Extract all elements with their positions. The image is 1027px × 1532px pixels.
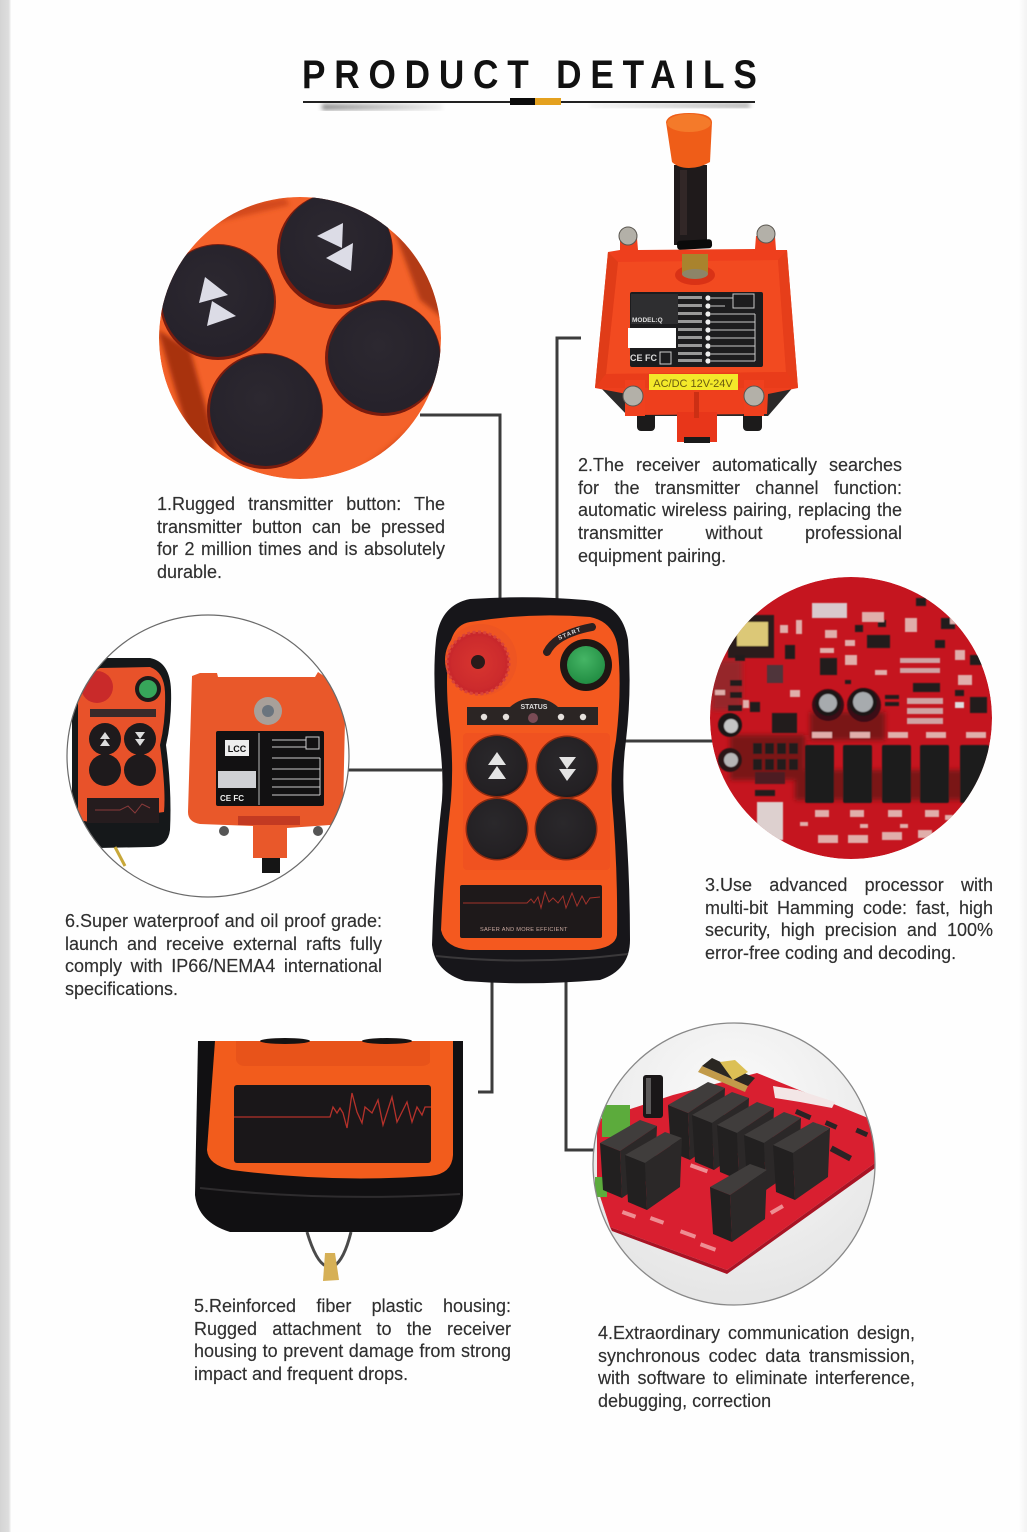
green start button	[560, 639, 612, 691]
recess	[236, 1041, 430, 1066]
start label arc: START	[558, 627, 583, 642]
text block 2: transmitter without professional	[578, 523, 902, 543]
button blank right	[534, 798, 598, 860]
text block 6	[65, 911, 382, 1000]
button with arrows top	[277, 193, 393, 309]
display panel: SAFER AND MORE EFFICIENT	[480, 927, 568, 933]
connector lines	[348, 338, 714, 1150]
photo 2: receiver	[595, 113, 798, 443]
text block 6: 6.Super waterproof and oil proof grade:	[65, 911, 382, 931]
receiver antenna connector	[675, 254, 715, 285]
button blank left	[466, 798, 528, 860]
button right	[325, 300, 441, 416]
text block 2: automatic wireless pairing, replacing the	[578, 500, 902, 520]
small receiver label	[216, 731, 324, 806]
text block 4: debugging, correction	[598, 1391, 771, 1411]
receiver wiring label: CE FC	[630, 353, 658, 363]
receiver wiring label: MODEL:Q	[632, 317, 663, 324]
button up	[466, 734, 528, 798]
small receiver label: LCC	[228, 744, 247, 754]
button with arrows left	[160, 244, 276, 360]
white connector bottom	[757, 802, 783, 840]
transformer	[698, 1058, 755, 1092]
photo 6 outline	[67, 615, 349, 897]
white connector top	[812, 603, 847, 618]
receiver lower connector	[677, 392, 717, 443]
remote orange face	[441, 615, 620, 950]
silkscreen marks	[715, 610, 986, 843]
connector: feature 6	[348, 768, 442, 772]
shading wedges	[158, 198, 445, 470]
text block 6: comply with IP66/NEMA4 international	[65, 956, 382, 976]
white connector	[773, 1086, 835, 1108]
text block 3: 3.Use advanced processor with	[705, 875, 993, 895]
text block 6: launch and receive external rafts fully	[65, 934, 382, 954]
text block 5	[194, 1296, 511, 1384]
receiver voltage label: AC/DC 12V-24V	[653, 378, 733, 390]
text block 4	[598, 1323, 915, 1412]
resistor arrays	[900, 658, 943, 724]
text block 3: security, high precision and 100%	[705, 920, 993, 940]
status bar: STATUS	[521, 704, 548, 711]
text block 1: transmitter button can be pressed	[157, 517, 445, 537]
text block 2: 2.The receiver automatically searches	[578, 455, 902, 475]
start label arc	[547, 627, 592, 652]
text block 1: durable.	[157, 562, 222, 582]
connector: feature 1	[420, 415, 500, 600]
lower shell seam	[436, 954, 628, 961]
connector: feature 4	[566, 980, 597, 1150]
text block 4: 4.Extraordinary communication design,	[598, 1323, 915, 1343]
title underline	[303, 98, 755, 110]
text block 3: multi-bit Hamming code: fast, high	[705, 898, 993, 918]
photo 4 outline	[593, 1023, 875, 1305]
title: PRODUCT DETAILS	[302, 52, 766, 96]
board silkscreen	[622, 1123, 829, 1252]
text block 1: for 2 million times and is absolutely	[157, 539, 445, 559]
photo 4: circuit board angled	[593, 1023, 875, 1305]
ring	[307, 1232, 351, 1266]
photo 5: housing close-up	[195, 1038, 463, 1281]
relays front left	[600, 1120, 682, 1210]
display panel	[460, 885, 602, 938]
connector: feature 3	[622, 740, 714, 742]
button bottom	[207, 353, 323, 469]
relay front	[710, 1164, 767, 1242]
text block 2: for the transmitter channel function:	[578, 478, 902, 498]
text block 4: synchronous codec data transmission,	[598, 1346, 915, 1366]
emergency stop button	[445, 624, 517, 696]
text block 3	[705, 875, 993, 964]
receiver voltage label	[649, 374, 738, 390]
antenna cap	[666, 113, 712, 168]
text block 3: error-free coding and decoding.	[705, 943, 956, 963]
text block 5: housing to prevent damage from strong	[194, 1341, 511, 1361]
photo 3: circuit board	[710, 577, 995, 859]
receiver screws	[619, 225, 775, 406]
receiver bottom ears	[625, 380, 764, 416]
dark board regions	[712, 660, 995, 800]
button down	[536, 736, 598, 798]
text block 5: impact and frequent drops.	[194, 1364, 408, 1384]
receiver wiring label	[628, 292, 763, 367]
right page edge	[1019, 0, 1027, 1532]
central remote transmitter	[432, 597, 630, 983]
remote shell	[432, 597, 630, 983]
receiver underside posts	[598, 385, 795, 431]
text block 6: specifications.	[65, 979, 178, 999]
lower housing seam	[200, 1188, 460, 1197]
photo 6: transmitter and receiver	[72, 658, 345, 873]
ic chips	[728, 598, 987, 796]
relays back row	[668, 1082, 830, 1200]
photo 1: transmitter buttons	[158, 193, 445, 479]
board	[597, 1073, 875, 1270]
text block 4: with software to eliminate interference,	[598, 1368, 915, 1388]
text block 2: equipment pairing.	[578, 546, 726, 566]
connector: feature 2	[557, 338, 581, 600]
text block 5: Rugged attachment to the receiver	[194, 1319, 511, 1339]
body	[195, 1041, 463, 1232]
antenna	[674, 165, 712, 250]
receiver body	[595, 236, 798, 415]
relays	[805, 745, 989, 803]
tag	[323, 1253, 339, 1281]
small remote	[72, 658, 171, 848]
small components	[795, 1109, 868, 1161]
text block 2	[578, 455, 902, 566]
connector: feature 5	[478, 980, 492, 1092]
display panel	[234, 1085, 431, 1163]
small receiver label: CE FC	[220, 794, 244, 803]
text block 5: 5.Reinforced fiber plastic housing:	[194, 1296, 511, 1316]
text block 1	[157, 494, 445, 582]
text block 1: 1.Rugged transmitter button: The	[157, 494, 445, 514]
capacitors	[718, 688, 881, 772]
capacitor	[643, 1075, 663, 1118]
small receiver	[188, 672, 345, 873]
button recess	[463, 733, 610, 870]
key ring	[115, 847, 125, 866]
waveform	[234, 1093, 431, 1128]
status bar	[467, 698, 598, 725]
left page edge	[0, 0, 11, 1532]
green terminals	[595, 1105, 630, 1197]
transformer	[728, 615, 774, 658]
